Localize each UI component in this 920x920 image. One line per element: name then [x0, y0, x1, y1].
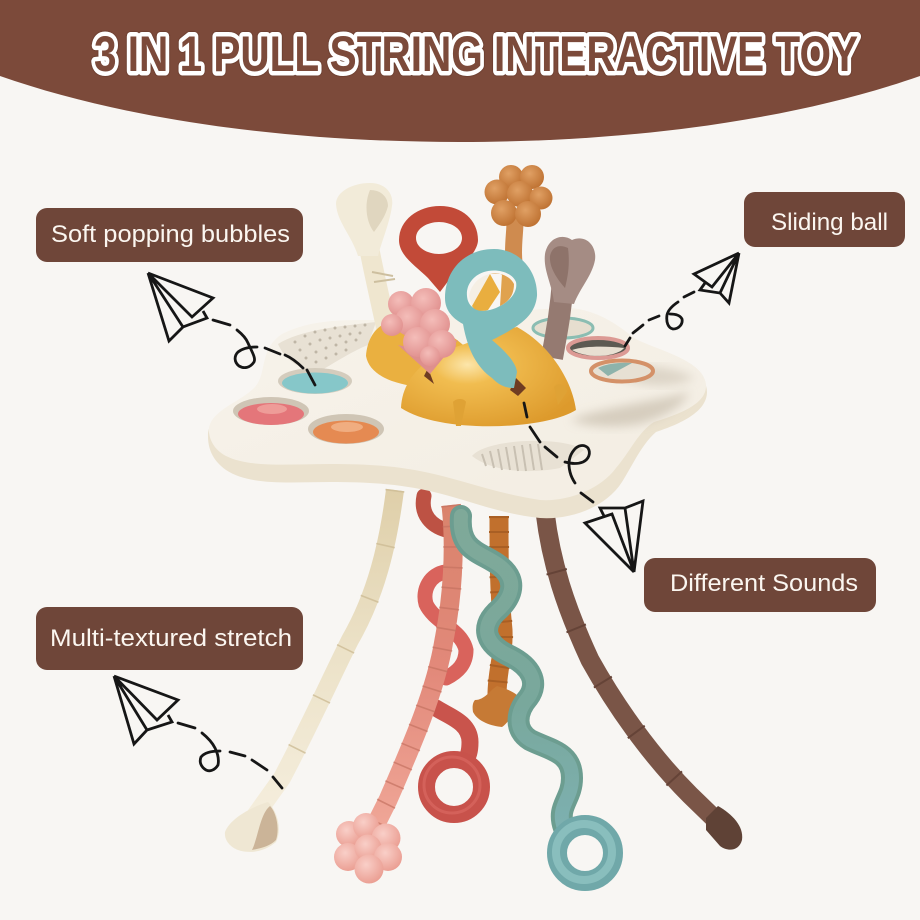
string: orange knob	[473, 516, 518, 727]
label: sliding ball	[744, 192, 905, 247]
label: different sounds	[644, 558, 876, 612]
ring: pink	[568, 338, 628, 358]
toy: teal ring	[445, 249, 537, 388]
ribbed grille	[472, 441, 584, 471]
toy: cream stem	[336, 183, 395, 345]
plate side	[208, 310, 707, 518]
label: sliding ball: Sliding ball	[771, 209, 888, 236]
string: salmon flower	[334, 505, 453, 884]
string: cream teether	[225, 490, 395, 852]
string: teal ring	[461, 516, 613, 881]
plate top	[209, 308, 706, 500]
plate	[208, 308, 707, 518]
ring: teal	[533, 318, 593, 338]
arrow: bubbles paper plane	[148, 273, 315, 385]
header banner	[0, 0, 920, 142]
speaker dots	[278, 322, 376, 372]
toy: red ring	[399, 206, 478, 292]
label: different sounds: Different Sounds	[670, 570, 858, 597]
back dome	[366, 321, 470, 388]
bubble: orange	[308, 414, 384, 444]
bubble: pink	[233, 397, 309, 425]
label: multi-textured stretch: Multi-textured stretch	[50, 625, 292, 652]
label: multi-textured stretch	[36, 607, 303, 670]
arrow: stretch paper plane	[114, 676, 282, 788]
label: soft popping bubbles: Soft popping bubbles	[51, 221, 290, 248]
toy: mauve teether	[545, 237, 595, 358]
ring: orange	[591, 360, 653, 382]
string: red ring	[423, 496, 482, 814]
bubble: teal	[278, 368, 352, 394]
arrow: sounds paper plane	[524, 403, 643, 572]
plate shadow	[570, 392, 690, 427]
label: soft popping bubbles	[36, 208, 303, 262]
hanging strings	[225, 490, 742, 884]
toy: orange cluster	[484, 165, 552, 262]
front dome	[401, 327, 576, 426]
toy: pink cluster	[381, 288, 458, 374]
string: brown teether	[545, 512, 742, 850]
arrow: sliding ball paper plane	[625, 253, 739, 346]
